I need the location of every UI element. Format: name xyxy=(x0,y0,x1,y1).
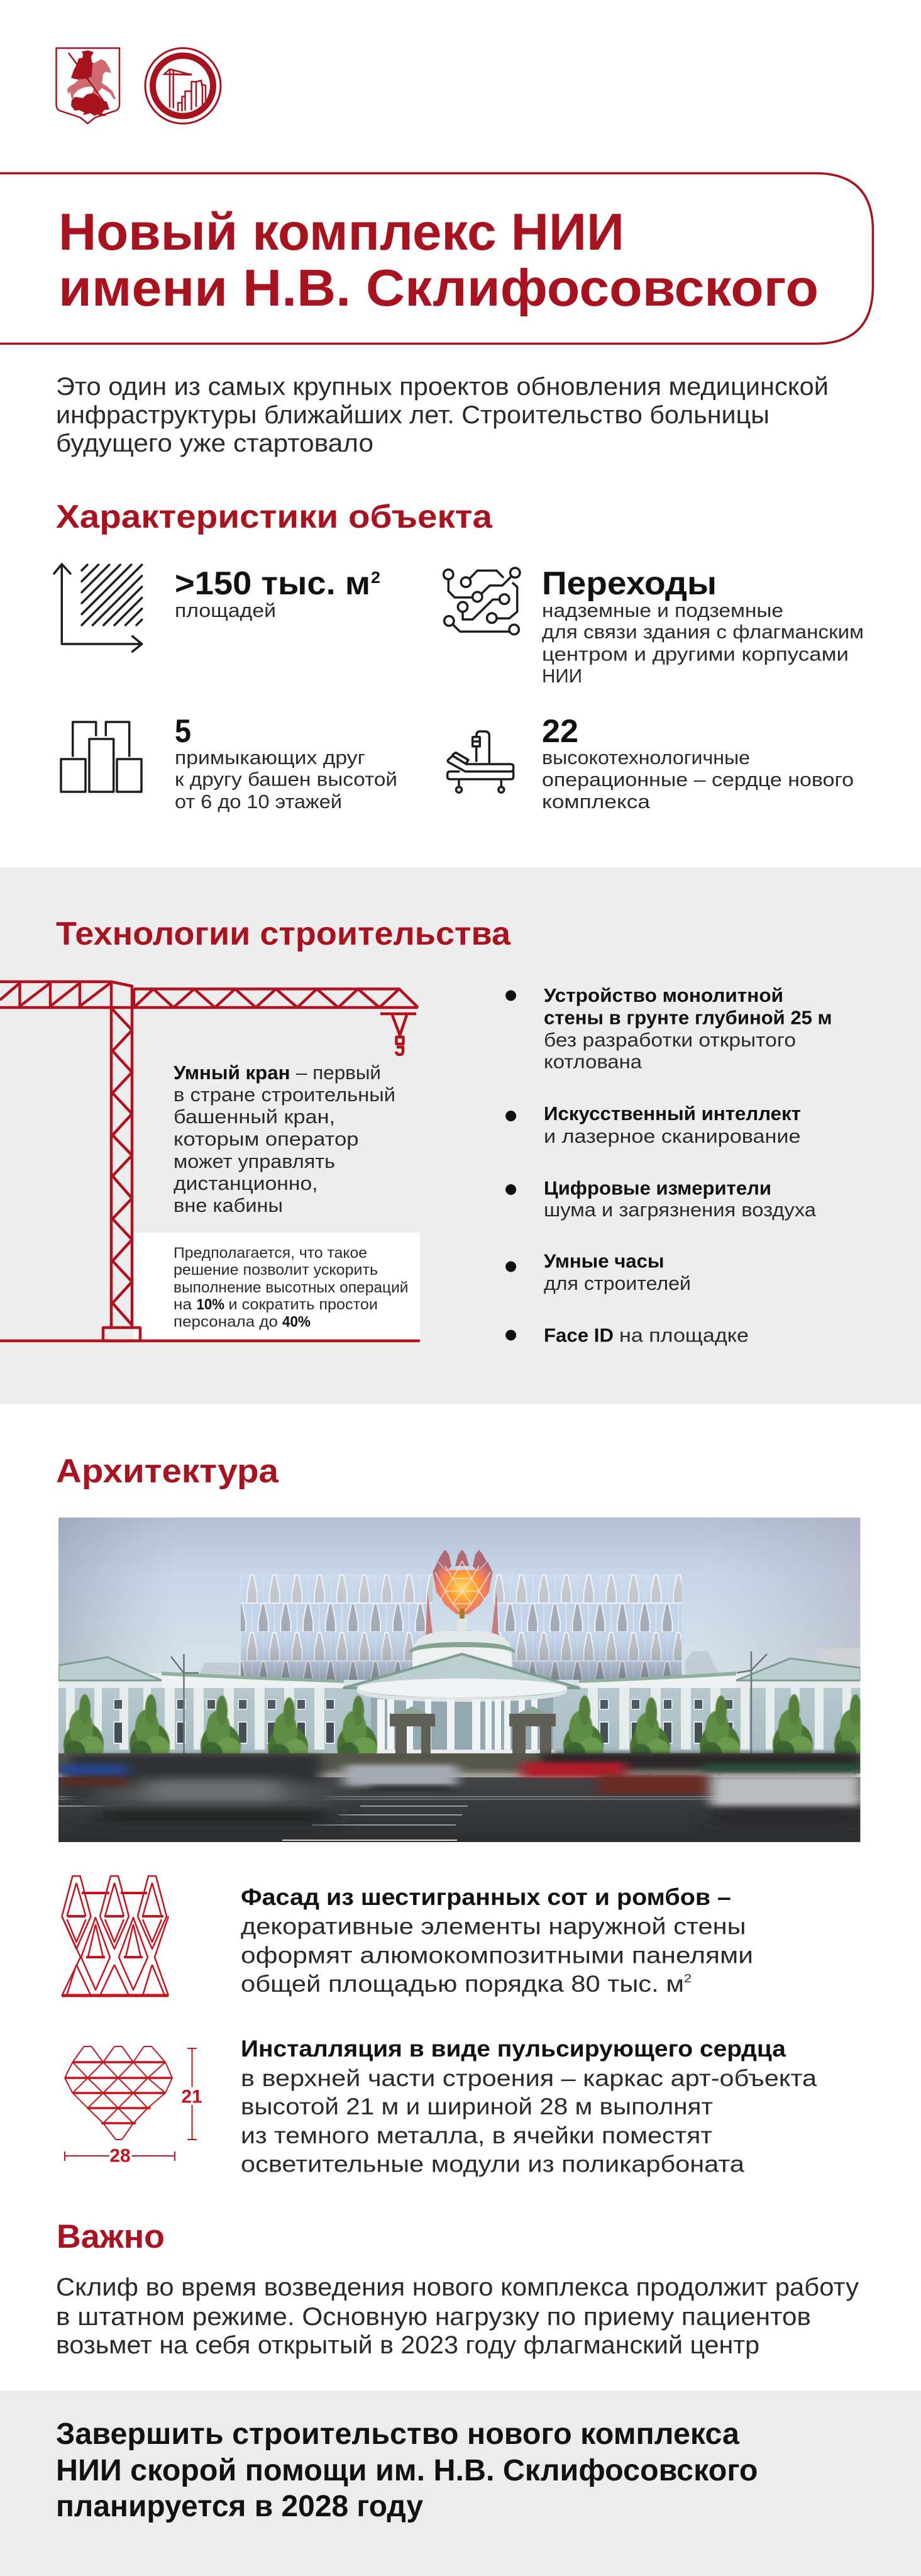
list item: meters: шума и загрязнения воздуха xyxy=(544,1199,817,1221)
heading: characteristics: Характеристики объекта xyxy=(56,499,493,535)
block: facade xyxy=(62,1876,753,1997)
list item: smart watch: Умные часы xyxy=(544,1250,664,1272)
list: technologies xyxy=(505,984,832,1346)
title: имени Н.В. Склифосовского xyxy=(58,258,819,317)
panel: construction technologies xyxy=(0,867,921,1404)
stat: passages: Переходы xyxy=(542,565,717,602)
text: crane benefits: решение позволит ускорить xyxy=(174,1262,378,1279)
text: facade xyxy=(241,1884,753,1997)
list item: wall: стены в грунте глубиной 25 м xyxy=(544,1006,832,1029)
list item: Face ID: Face ID xyxy=(544,1324,614,1346)
stat: passages xyxy=(542,565,864,687)
stat: passages: НИИ xyxy=(542,665,582,687)
stat: operating rooms: операционные – сердце нового xyxy=(542,769,854,791)
text: crane benefits: на xyxy=(174,1296,192,1313)
icon: facade honeycomb xyxy=(62,1876,168,1996)
text: completion date: Завершить строительство нового комплекса xyxy=(56,2418,739,2451)
icon: Moscow coat of arms xyxy=(57,48,119,123)
text: smart crane: в стране строительный xyxy=(174,1084,395,1106)
title panel xyxy=(0,174,873,343)
trees xyxy=(63,1694,874,1778)
text: crane benefits: персонала до xyxy=(174,1313,278,1331)
road xyxy=(58,1753,861,1843)
list item: Face ID xyxy=(505,1324,749,1346)
stat: passages: надземные и подземные xyxy=(542,599,783,621)
text: facade: общей площадью порядка 80 тыс. м xyxy=(241,1971,684,1997)
text: smart crane: Умный кран xyxy=(174,1062,290,1084)
stat: operating rooms xyxy=(542,713,854,813)
callout: white box xyxy=(133,1233,420,1341)
list item: Face ID: на площадке xyxy=(619,1324,749,1346)
heading: architecture: Архитектура xyxy=(56,1453,279,1490)
text: facade: Фасад из шестигранных сот и ромбов – xyxy=(241,1884,731,1910)
stat: operating rooms: 22 xyxy=(542,713,578,750)
text: facade: декоративные элементы наружной стены xyxy=(241,1913,746,1940)
text: heart installation: в верхней части строения – каркас арт-объекта xyxy=(241,2065,817,2091)
icon: circuit passages xyxy=(444,568,520,635)
text: facade: оформят алюмокомпозитными панелями xyxy=(241,1942,753,1968)
title xyxy=(58,203,819,317)
text: smart crane: может управлять xyxy=(174,1150,335,1172)
stat: area: >150 тыс. м xyxy=(175,565,370,602)
title: Новый комплекс НИИ xyxy=(58,203,624,261)
text: important xyxy=(56,2273,859,2359)
icon: heart lattice with dimensions: 21 xyxy=(181,2087,202,2107)
stat: towers xyxy=(175,713,397,813)
stat: towers: к другу башен высотой xyxy=(175,769,397,790)
text: heart installation xyxy=(241,2036,817,2177)
text: completion date: планируется в 2028 году xyxy=(56,2490,423,2523)
text: crane benefits: 10% xyxy=(196,1296,224,1313)
icon: area xyxy=(54,564,142,652)
stat: operating rooms: высокотехнологичные xyxy=(542,747,750,769)
text: smart crane: башенный кран, xyxy=(174,1106,335,1128)
classical wings xyxy=(58,1657,861,1753)
list item: AI: и лазерное сканирование xyxy=(544,1125,801,1147)
text: heart installation: высотой 21 м и шириной 28 м выполнят xyxy=(241,2094,713,2119)
heading: technologies: Технологии строительства xyxy=(56,916,511,952)
gates xyxy=(390,1706,556,1753)
list item: AI xyxy=(505,1102,801,1147)
heading: important: Важно xyxy=(57,2218,165,2255)
text: crane benefits: 40% xyxy=(282,1313,311,1331)
text: smart crane: – первый xyxy=(296,1062,381,1084)
new tower facade xyxy=(199,1574,861,1680)
list item: smart watch: для строителей xyxy=(544,1272,691,1294)
text: completion date: НИИ скорой помощи им. Н.В. Склифосовского xyxy=(56,2454,758,2487)
stat: area: площадей xyxy=(175,599,276,621)
text: crane benefits: и сократить простои xyxy=(229,1296,378,1313)
icon: heart lattice with dimensions xyxy=(65,2046,202,2166)
icon: tower crane xyxy=(0,982,420,1341)
panel: characteristics xyxy=(54,564,864,813)
text: heart installation: Инсталляция в виде пульсирующего сердца xyxy=(241,2036,786,2062)
stat: passages: для связи здания с флагманским xyxy=(542,621,864,643)
block: heart installation xyxy=(65,2036,817,2177)
icon: towers xyxy=(61,722,141,792)
text: smart crane: вне кабины xyxy=(174,1194,283,1216)
text: crane benefits: Предполагается, что такое xyxy=(174,1245,367,1262)
image: building render xyxy=(58,1518,874,1843)
heart installation xyxy=(433,1550,493,1619)
text: smart crane xyxy=(174,1062,395,1216)
street lamps xyxy=(171,1652,767,1765)
text: heart installation: осветительные модули из поликарбоната xyxy=(241,2151,744,2177)
text: completion date xyxy=(56,2418,758,2523)
panel: conclusion xyxy=(0,2390,921,2576)
text: smart crane: которым оператор xyxy=(174,1128,358,1150)
icon: construction complex emblem xyxy=(145,48,221,123)
stat: passages: центром и другими корпусами xyxy=(542,643,849,665)
text: crane benefits: выполнение высотных операций xyxy=(174,1279,409,1296)
list item: wall xyxy=(505,984,832,1073)
stat: towers: 5 xyxy=(175,713,191,750)
text: important: возьмет на себя открытый в 2023 году флагманский центр xyxy=(56,2331,759,2359)
text: important: Склиф во время возведения нового комплекса продолжит работу xyxy=(56,2273,859,2301)
intro text: инфраструктуры ближайших лет. Строительство больницы xyxy=(56,401,769,429)
intro text: будущего уже стартовало xyxy=(56,430,373,457)
list item: wall: котлована xyxy=(544,1050,642,1073)
stat: towers: примыкающих друг xyxy=(175,747,365,769)
icon: heart lattice with dimensions: 28 xyxy=(109,2146,131,2166)
central portico xyxy=(344,1654,580,1765)
list item: wall: без разработки открытого xyxy=(544,1029,796,1051)
stat: towers: от 6 до 10 этажей xyxy=(175,791,342,813)
text: heart installation: из темного металла, в ячейки поместят xyxy=(241,2123,712,2148)
dome xyxy=(409,1619,516,1670)
list item: meters xyxy=(505,1177,817,1221)
stat: area: 2 xyxy=(371,568,380,587)
intro text xyxy=(56,373,829,457)
header logos xyxy=(57,48,221,123)
list item: meters: Цифровые измерители xyxy=(544,1177,771,1199)
stat: area xyxy=(175,565,380,621)
intro text: Это один из самых крупных проектов обновления медицинской xyxy=(56,373,829,401)
text: important: в штатном режиме. Основную нагрузку по приему пациентов xyxy=(56,2303,811,2331)
list item: smart watch xyxy=(505,1250,691,1294)
list item: AI: Искусственный интеллект xyxy=(544,1102,801,1124)
blurred cars xyxy=(58,1753,861,1825)
text: facade: 2 xyxy=(684,1972,692,1985)
list item: wall: Устройство монолитной xyxy=(544,984,783,1006)
text: smart crane: дистанционно, xyxy=(174,1172,318,1194)
stat: operating rooms: комплекса xyxy=(542,791,651,813)
text: crane benefits xyxy=(174,1245,409,1331)
icon: operating table xyxy=(448,731,514,792)
